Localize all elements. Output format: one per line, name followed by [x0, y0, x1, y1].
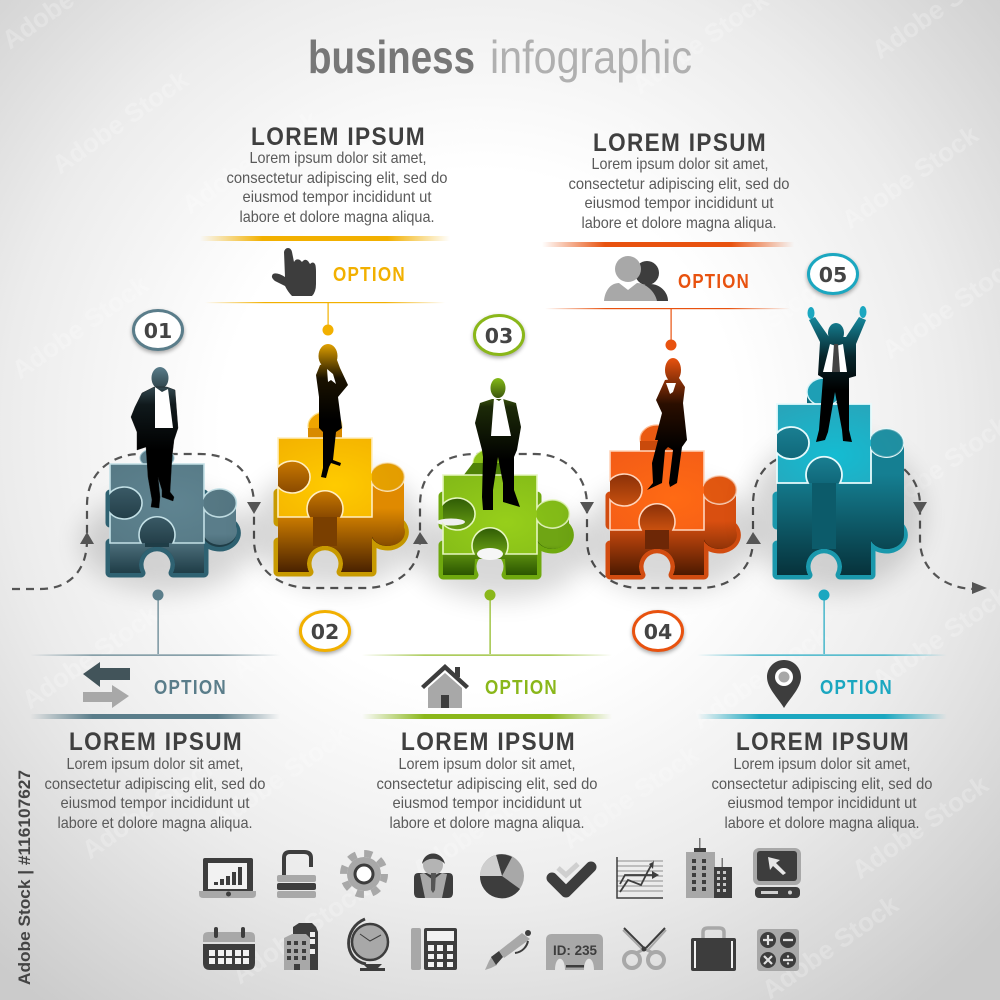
- connector dot 1: [152, 590, 164, 600]
- heading 3: LOREM IPSUM: [401, 728, 576, 756]
- watermark pattern: Adobe Stock: [836, 119, 984, 235]
- title: [308, 31, 692, 83]
- figure 4 businesswoman sitting: [647, 358, 687, 490]
- connector dot 2: [322, 324, 334, 336]
- connector dot 5: [818, 590, 830, 600]
- icon: briefcase: [691, 928, 736, 971]
- number badge 02: 02: [311, 620, 339, 644]
- watermark pattern: Adobe Stock: [686, 619, 834, 735]
- icon: id card: ID: 235: [553, 942, 597, 958]
- body text 5: Lorem ipsum dolor sit amet,: [734, 756, 910, 773]
- icon: gear: [344, 854, 384, 894]
- panel: option 1 (bottom slate): [30, 590, 280, 832]
- icon: pointing hand: [272, 248, 316, 296]
- panel: option 4 (top orange): [542, 129, 794, 350]
- panel: option 5 (bottom cyan): [697, 590, 947, 832]
- icon: businessman bust: [414, 854, 453, 898]
- icon: calendar: [203, 927, 255, 970]
- icon: math keys: [757, 929, 799, 971]
- watermark pattern: Adobe Stock: [46, 64, 194, 180]
- watermark pattern: Adobe Stock: [546, 589, 694, 705]
- body text 2: consectetur adipiscing elit, sed do: [226, 170, 448, 187]
- icon: laptop chart: [199, 858, 256, 898]
- heading 5: LOREM IPSUM: [736, 728, 910, 756]
- figure 3 businessman: [475, 378, 521, 510]
- watermark pattern: Adobe Stock: [211, 234, 359, 350]
- figure 2 businesswoman: [316, 344, 348, 478]
- watermark pattern: Adobe Stock: [546, 249, 694, 365]
- body text 3: consectetur adipiscing elit, sed do: [376, 776, 598, 793]
- icon: id card: [546, 934, 603, 970]
- watermark pattern: Adobe Stock: [846, 769, 994, 885]
- number badge 05: [807, 254, 859, 297]
- watermark pattern: Adobe Stock: [16, 599, 164, 715]
- body text 2: [226, 150, 448, 226]
- option label 5: OPTION: [820, 677, 893, 699]
- watermark pattern: Adobe Stock: [226, 569, 374, 685]
- puzzle piece 4: [580, 425, 756, 593]
- option label 2: OPTION: [333, 264, 406, 286]
- puzzle piece 3: [413, 449, 589, 599]
- body text 3: eiusmod tempor incididunt ut: [392, 795, 582, 812]
- icon: pen: [485, 930, 531, 970]
- body text 5: consectetur adipiscing elit, sed do: [712, 776, 933, 793]
- heading 1: LOREM IPSUM: [69, 728, 243, 756]
- body text 1: Lorem ipsum dolor sit amet,: [66, 756, 244, 773]
- body text 5: eiusmod tempor incididunt ut: [728, 795, 917, 812]
- dashed process path: [12, 454, 975, 589]
- icon: office building: [284, 923, 318, 970]
- number badge 03: [473, 316, 525, 358]
- puzzle piece 1: [80, 448, 256, 592]
- connector dot 3: [484, 590, 496, 600]
- watermark pattern: Adobe Stock: [346, 109, 494, 225]
- icon: calculator and phone: [411, 928, 457, 970]
- icon: scissors: [623, 928, 666, 968]
- body text 4: consectetur adipiscing elit, sed do: [568, 176, 790, 193]
- watermark pattern: Adobe Stock: [356, 609, 504, 725]
- body text 2: labore et dolore magna aliqua.: [240, 209, 434, 226]
- body text 3: Lorem ipsum dolor sit amet,: [398, 756, 576, 773]
- body text 5: [712, 756, 933, 832]
- number badge 03: 03: [485, 324, 513, 348]
- option label 4: OPTION: [678, 271, 750, 293]
- body text 4: eiusmod tempor incididunt ut: [584, 195, 774, 212]
- watermark pattern: Adobe Stock: [6, 269, 154, 385]
- connector dot 4: [666, 340, 676, 350]
- icon: line chart: [617, 857, 663, 898]
- body text 5: labore et dolore magna aliqua.: [724, 815, 920, 832]
- number badge 02: [299, 612, 351, 654]
- body text 2: Lorem ipsum dolor sit amet,: [250, 150, 426, 167]
- icon: skyscrapers: [686, 838, 732, 898]
- number badge 01: 01: [144, 319, 172, 343]
- stock id side text: Adobe Stock | #116107627: [15, 770, 34, 985]
- body text 3: labore et dolore magna aliqua.: [390, 815, 584, 832]
- watermark pattern: Adobe Stock: [206, 719, 354, 835]
- body text 1: eiusmod tempor incididunt ut: [60, 795, 250, 812]
- body text 4: [568, 156, 790, 232]
- figure 5 businessman celebrating: [808, 306, 866, 442]
- icon: open padlock: [277, 852, 316, 898]
- number badge 05: 05: [819, 263, 847, 287]
- icon: globe clock: [349, 919, 388, 971]
- body text 1: consectetur adipiscing elit, sed do: [44, 776, 266, 793]
- body text 4: labore et dolore magna aliqua.: [582, 215, 776, 232]
- watermark pattern: Adobe Stock: [76, 749, 224, 865]
- panel: option 3 (bottom green): [362, 590, 612, 832]
- watermark pattern: Adobe Stock: [406, 769, 554, 885]
- watermark pattern: Adobe Stock: [556, 739, 704, 855]
- heading 2: LOREM IPSUM: [251, 123, 426, 151]
- number badge 01: [132, 310, 184, 353]
- number badge 04: 04: [644, 620, 672, 644]
- body text 2: eiusmod tempor incididunt ut: [242, 189, 432, 206]
- body text 1: [44, 756, 266, 832]
- option label 1: OPTION: [154, 677, 227, 699]
- puzzle piece 2: [248, 412, 424, 588]
- watermark pattern: Adobe Stock: [506, 114, 654, 230]
- title: infographic: [490, 31, 692, 83]
- figure 1 businessman: [131, 367, 178, 508]
- watermark pattern: Adobe Stock: [226, 874, 374, 990]
- icon: map pin: [767, 660, 801, 708]
- option label 3: OPTION: [485, 677, 558, 699]
- icon: house: [421, 664, 469, 708]
- watermark pattern: Adobe Stock: [686, 269, 834, 385]
- watermark pattern: Adobe Stock: [176, 104, 324, 220]
- body text 1: labore et dolore magna aliqua.: [58, 815, 252, 832]
- icon: exchange arrows: [83, 662, 130, 708]
- puzzle piece 5: [747, 378, 923, 592]
- icon: people: [604, 256, 668, 301]
- title: business: [308, 31, 475, 83]
- panel: option 2 (top yellow): [200, 123, 450, 336]
- body text 4: Lorem ipsum dolor sit amet,: [592, 156, 768, 173]
- number badge 04: [632, 612, 684, 654]
- arrowheads on path: [80, 502, 987, 594]
- icon: check mark: [552, 864, 591, 892]
- heading 4: LOREM IPSUM: [593, 129, 767, 157]
- icon: pie chart: [480, 854, 524, 898]
- body text 3: [376, 756, 598, 832]
- icon: computer with cursor: [753, 848, 801, 898]
